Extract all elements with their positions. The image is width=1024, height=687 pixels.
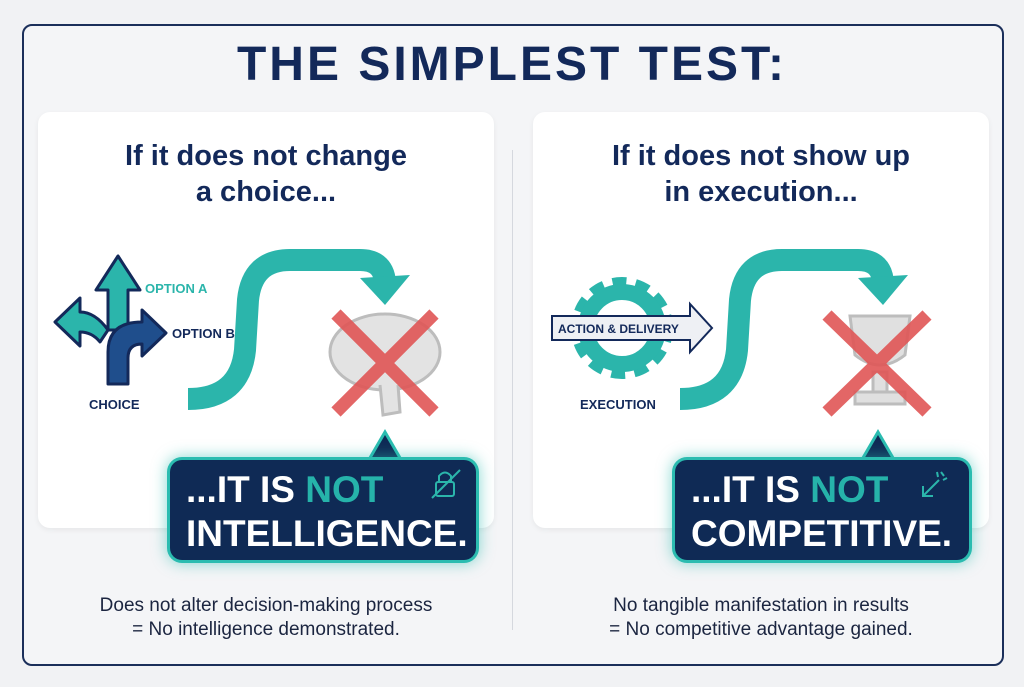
icon: broken arrow: [922, 471, 948, 497]
callout left: [170, 460, 476, 560]
label: action: ACTION & DELIVERY: [558, 322, 679, 336]
icon: crossroads: [55, 256, 166, 384]
icon: broken lock: [431, 469, 461, 499]
callout pointers: [367, 432, 403, 463]
heading left: a choice...: [196, 176, 336, 208]
label: option b: OPTION B: [172, 326, 235, 341]
footer left: [100, 595, 432, 640]
callout right: ...IT IS NOT: [691, 469, 888, 510]
icon: gear: [552, 288, 712, 368]
icon: trophy with X: [827, 315, 927, 412]
callout left: ...IT IS NOT: [186, 469, 383, 510]
heading right: [612, 140, 910, 208]
panel: choice: [38, 112, 494, 528]
heading right: in execution...: [664, 176, 858, 208]
footer left: = No intelligence demonstrated.: [132, 619, 400, 640]
heading left: If it does not change: [125, 140, 407, 172]
label: choice: CHOICE: [89, 397, 140, 412]
arrow left: [188, 260, 410, 399]
heading left: [125, 140, 407, 208]
footer right: No tangible manifestation in results: [613, 595, 909, 616]
title: THE SIMPLEST TEST:: [237, 38, 787, 91]
callout right: [675, 460, 969, 560]
panel: execution: [533, 112, 989, 528]
label: execution: EXECUTION: [580, 397, 656, 412]
callout left: INTELLIGENCE.: [186, 513, 468, 554]
heading right: If it does not show up: [612, 140, 910, 172]
icon: brain with X: [330, 314, 440, 415]
callout right: COMPETITIVE.: [691, 513, 952, 554]
footer right: = No competitive advantage gained.: [609, 619, 913, 640]
label: option a: OPTION A: [145, 281, 207, 296]
footer left: Does not alter decision-making process: [100, 595, 432, 616]
arrow right: [680, 260, 908, 399]
footer right: [609, 595, 913, 640]
